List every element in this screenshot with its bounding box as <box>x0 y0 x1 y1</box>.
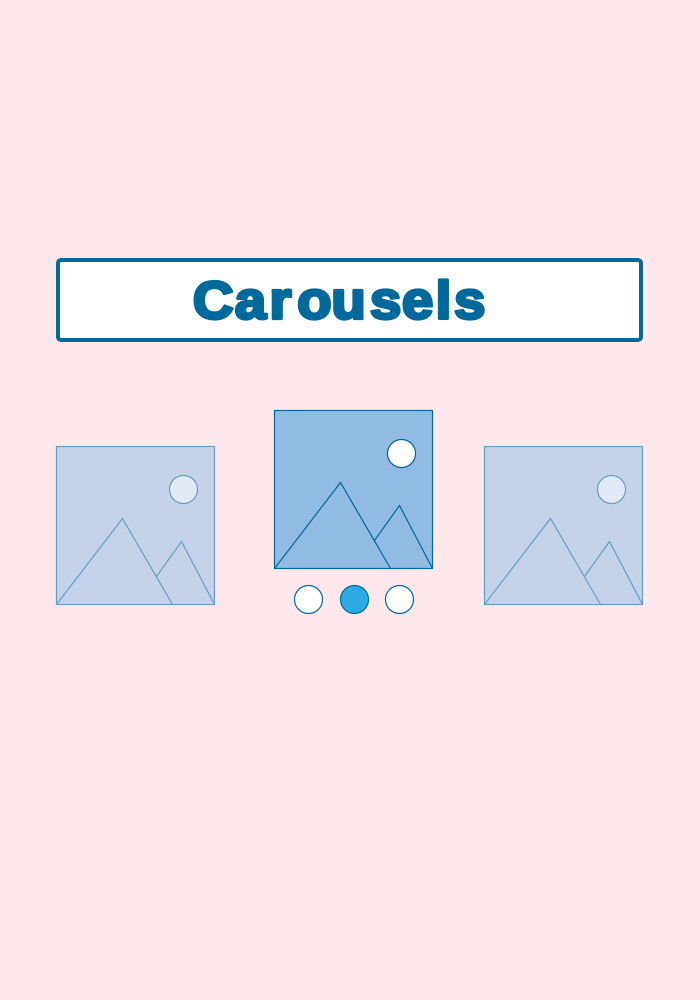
slide background <box>274 410 432 568</box>
icon: mountains <box>484 518 642 604</box>
icon: mountains <box>56 518 214 604</box>
carousel slide: left (inactive) <box>56 446 214 604</box>
dot: inactive third <box>386 586 414 614</box>
title banner <box>58 260 641 340</box>
icon: sun <box>598 476 626 504</box>
icon: sun <box>170 476 198 504</box>
carousel slide: center (active) <box>274 410 432 568</box>
icon: mountains <box>274 482 432 568</box>
dot: inactive first <box>294 586 322 614</box>
dot: active second <box>340 586 368 614</box>
slide background <box>484 446 642 604</box>
pagination dots <box>294 586 414 614</box>
banner box <box>58 260 641 340</box>
title: Carousels <box>193 271 485 330</box>
icon: sun <box>388 440 416 468</box>
slide background <box>56 446 214 604</box>
carousel slide: right (inactive) <box>484 446 642 604</box>
